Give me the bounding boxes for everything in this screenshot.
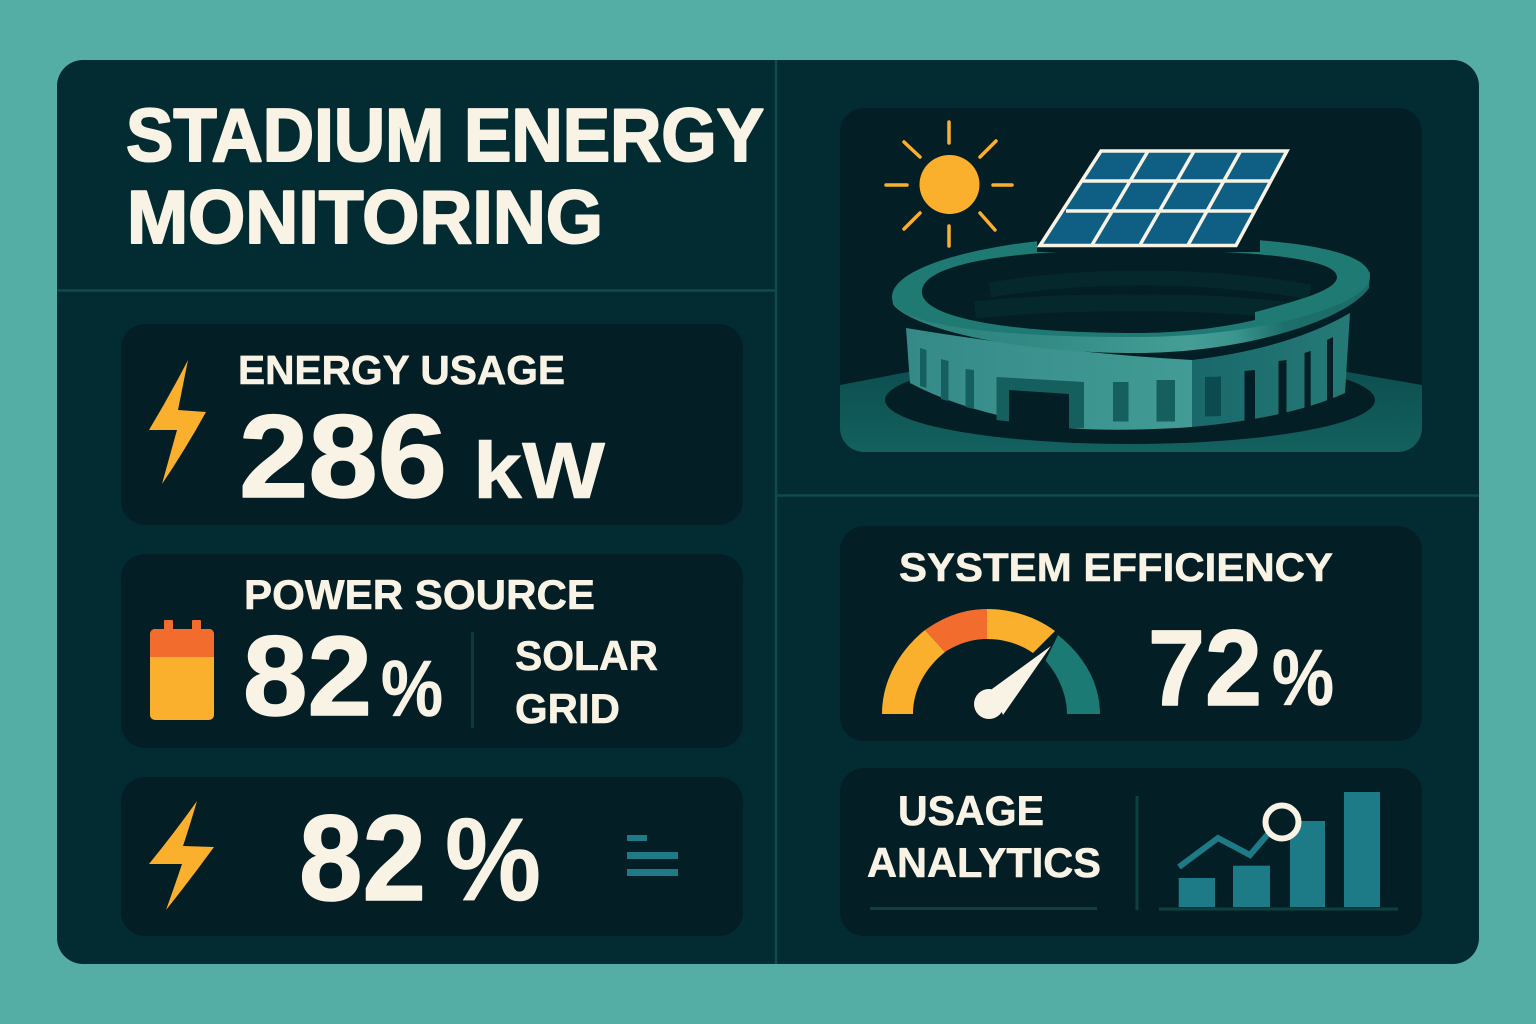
heading: power source: POWER SOURCE: [244, 571, 595, 618]
gauge needle: [974, 646, 1051, 719]
title: [126, 93, 764, 259]
heading: system efficiency: SYSTEM EFFICIENCY: [899, 546, 1333, 590]
value: 82%: [299, 790, 541, 926]
roof ring top face: [892, 236, 1370, 337]
labels: solar and grid: GRID: [515, 685, 620, 732]
labels: solar and grid: [515, 632, 658, 732]
panel: energy usage: [121, 324, 743, 525]
value: 72%: %: [1272, 633, 1334, 722]
door: [996, 377, 1084, 429]
icon: sun: [886, 122, 1012, 246]
solar panel: [1040, 151, 1287, 246]
heading: energy usage: ENERGY USAGE: [238, 347, 565, 393]
value: 286 kW: kW: [473, 426, 606, 515]
value: 72%: 72: [1148, 607, 1262, 728]
value: 82%: %: [445, 794, 541, 926]
gauge: [882, 609, 1100, 719]
title: STADIUM ENERGY: [126, 93, 764, 177]
value: 286 kW: 286: [239, 391, 447, 523]
heading: usage analytics: ANALYTICS: [867, 839, 1101, 886]
panel: system efficiency: [840, 526, 1422, 741]
chart: bars and trend line: [1179, 792, 1380, 907]
title: MONITORING: [127, 175, 603, 259]
value: 82%: 82: [243, 613, 372, 739]
icon: lightning bolt: [149, 360, 206, 484]
panel: usage analytics: [840, 768, 1422, 936]
ground: [840, 372, 1422, 452]
heading: usage analytics: [867, 787, 1101, 886]
stadium wall: [906, 328, 1192, 430]
panel: 82 percent: [121, 777, 743, 936]
labels: solar and grid: SOLAR: [515, 632, 658, 679]
panel: stadium illustration: [840, 108, 1422, 452]
icon: list lines: [627, 835, 678, 876]
heading: usage analytics: USAGE: [898, 787, 1044, 834]
value: 82%: 82: [299, 790, 426, 926]
seating bowl: [922, 250, 1337, 333]
panel: power source: [121, 554, 743, 748]
value: 82%: %: [381, 644, 443, 733]
value: 72%: [1148, 607, 1334, 728]
icon: battery: [150, 620, 214, 720]
windows: [920, 337, 1333, 423]
gap behind solar panel: [1037, 228, 1260, 252]
value: 286 kW: [239, 391, 606, 523]
icon: lightning bolt: [149, 801, 214, 910]
roof ring front band: [892, 272, 1370, 353]
stadium: [892, 228, 1370, 430]
value: 82%: [243, 613, 443, 739]
